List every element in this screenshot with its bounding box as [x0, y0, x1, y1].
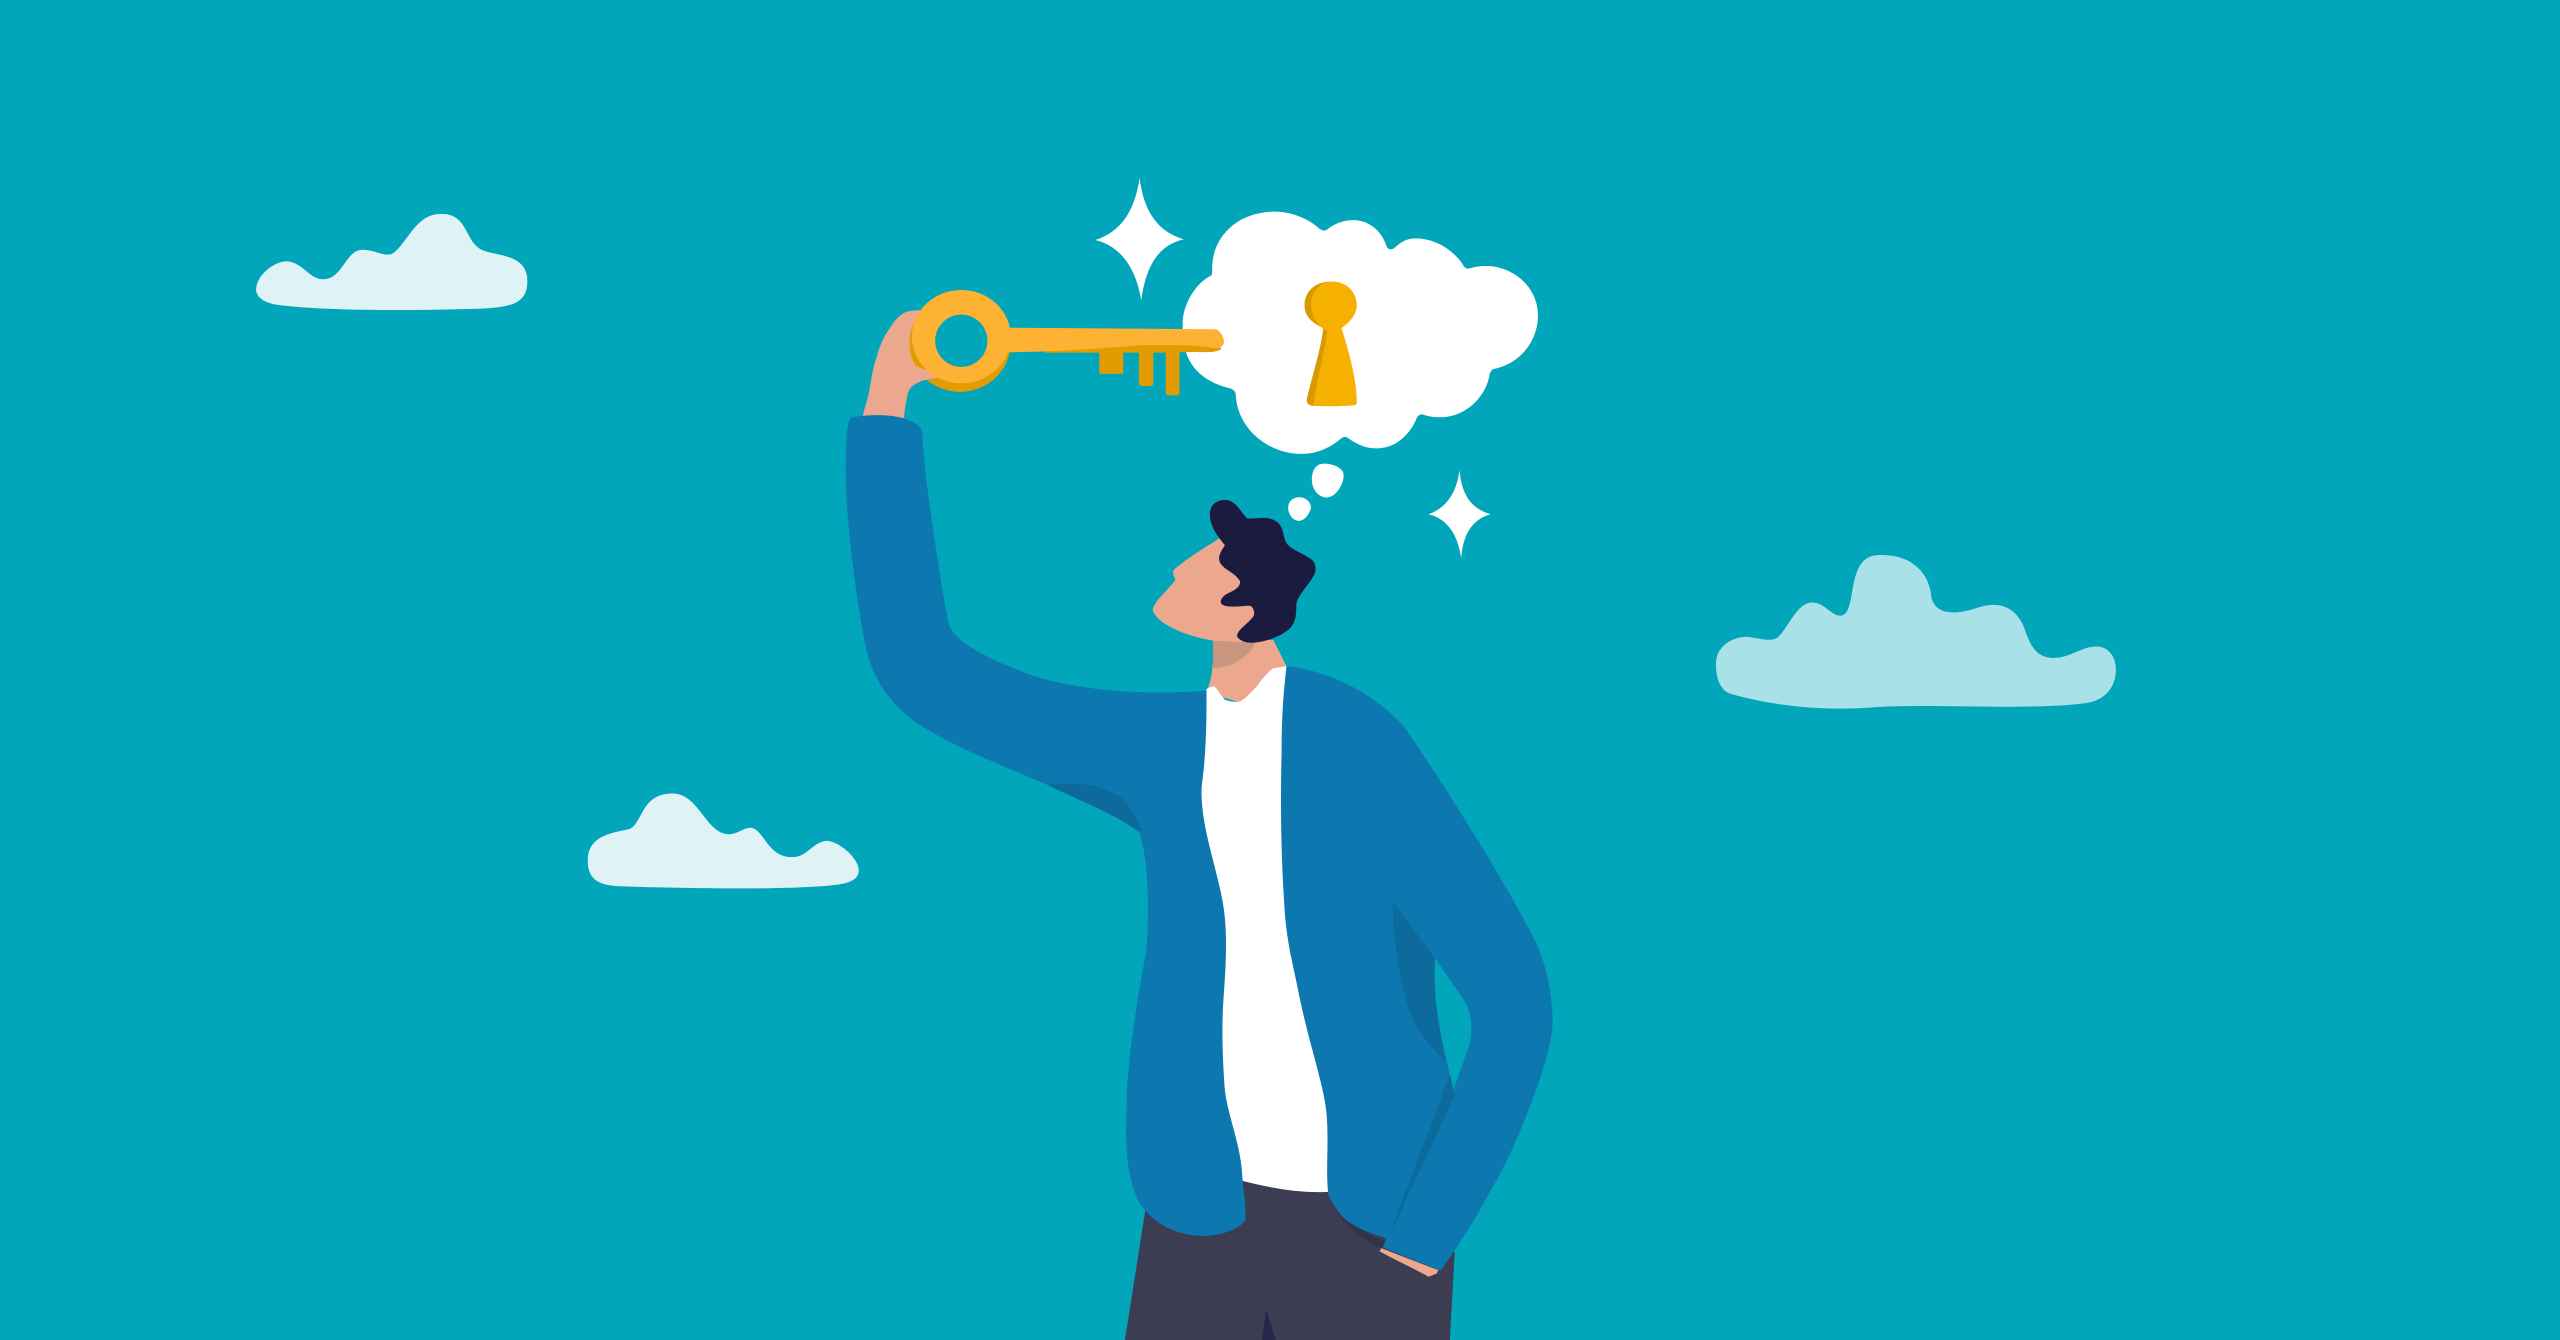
jacket: right panel and arm: [1281, 666, 1553, 1270]
tooth 2: [1139, 346, 1153, 386]
key shaft shadow: [1045, 340, 1221, 353]
trousers centre crease: [1262, 1309, 1276, 1340]
gap between arm and body: [1435, 958, 1471, 1091]
hair: [1210, 500, 1316, 643]
pocket shadow: [1332, 1205, 1386, 1249]
cloud: top left: [256, 214, 527, 310]
jacket: underarm shadow: [1048, 784, 1142, 833]
jacket: raised arm and left panel: [846, 415, 1246, 1236]
thought bubble: small: [1288, 497, 1311, 521]
raised hand: [863, 310, 980, 420]
thought bubble: large: [1312, 464, 1344, 497]
golden key: [901, 290, 1224, 395]
key shaft: [999, 328, 1224, 352]
person: [846, 310, 1553, 1340]
keyhole: [1311, 282, 1357, 406]
thought cloud shape: [1183, 212, 1538, 454]
keyhole shadow: [1304, 282, 1331, 406]
jacket: sleeve shadow: [1389, 1074, 1455, 1236]
sparkle: large: [1096, 178, 1184, 300]
hand in pocket: [1380, 1248, 1438, 1277]
key bow: [912, 290, 1011, 383]
jacket: body shadow: [1393, 901, 1446, 1061]
cloud: right: [1716, 555, 2116, 709]
trousers: [1125, 1179, 1455, 1340]
face: [1153, 522, 1290, 643]
tooth 3: [1166, 346, 1179, 395]
sparkle: small: [1429, 470, 1491, 558]
key teeth: [1099, 346, 1179, 395]
neck: [1207, 637, 1290, 705]
tooth 1: [1099, 346, 1123, 374]
thought cloud with keyhole: [1183, 212, 1538, 454]
key bow shadow: [909, 294, 1011, 392]
cloud: bottom left: [588, 793, 859, 888]
finger over key bow: [901, 364, 942, 392]
key hole: [935, 315, 987, 367]
neck shadow: [1213, 640, 1257, 668]
white shirt: [1184, 666, 1339, 1192]
